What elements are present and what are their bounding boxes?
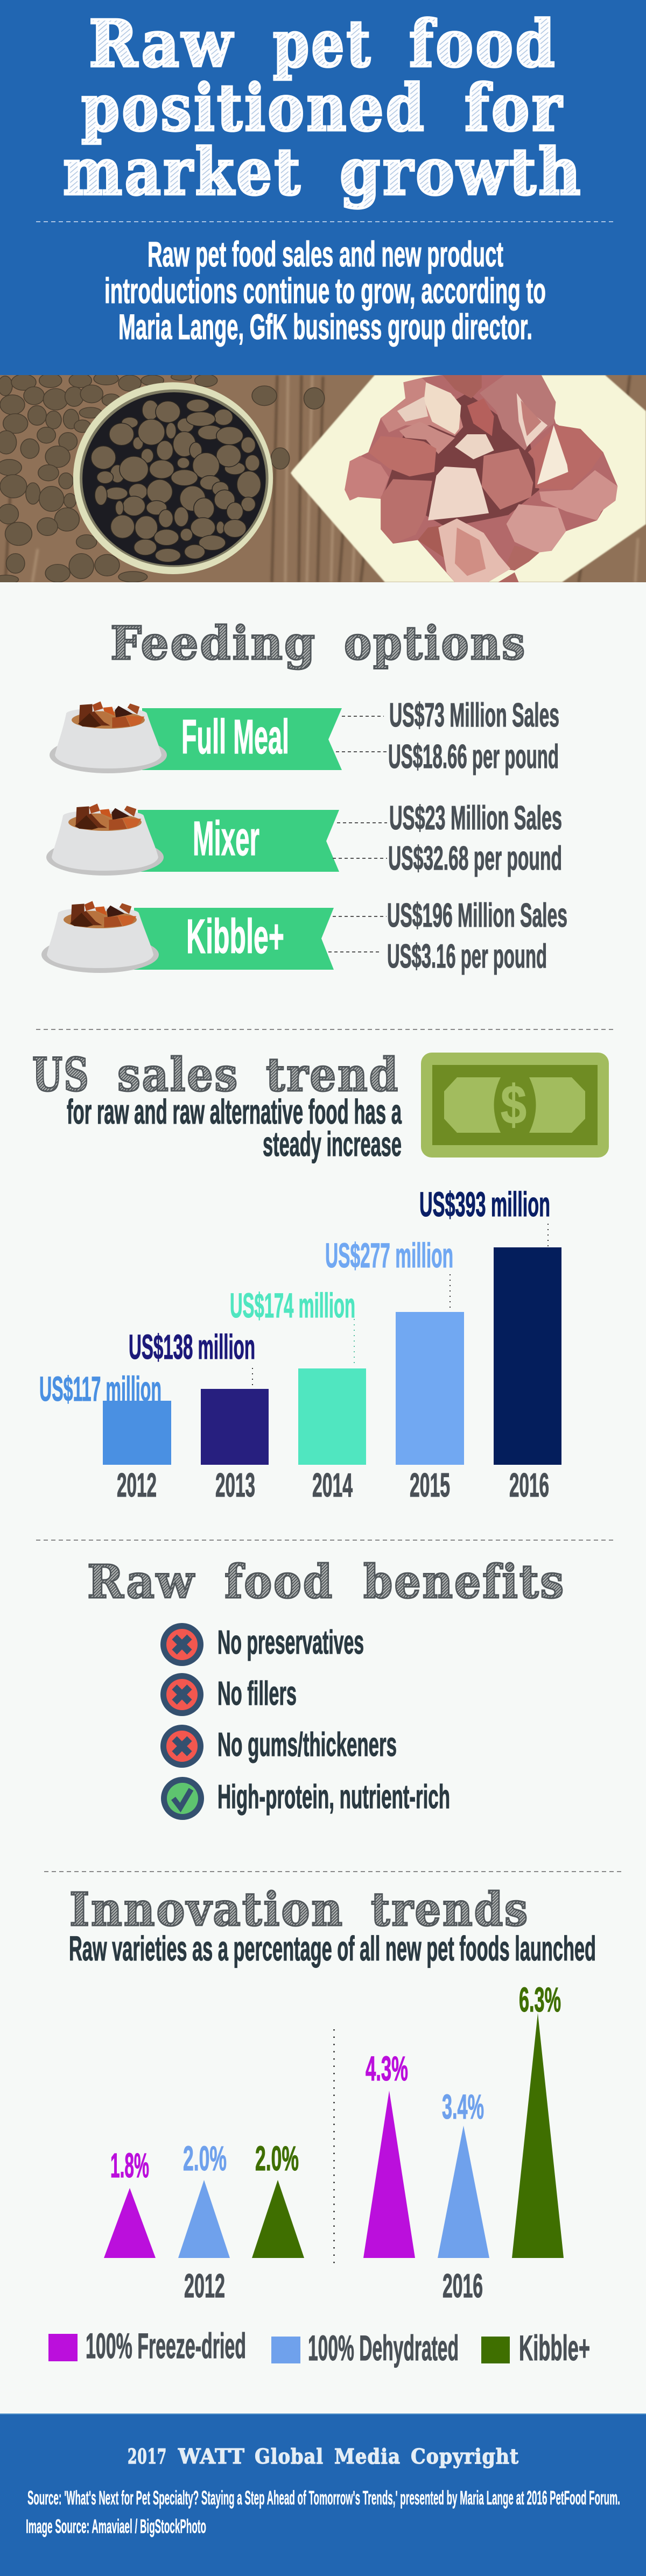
heading: raw food benefits: food [224, 1555, 334, 1609]
icon: no gums [160, 1725, 203, 1768]
copyright: 2017 [128, 2444, 167, 2468]
title [63, 6, 583, 210]
title: Raw [89, 6, 235, 82]
heading: innovation trends: Innovation [69, 1883, 344, 1937]
triangle chart: 2.0% [255, 2139, 299, 2178]
bar chart: US$174 million [230, 1286, 355, 1325]
text: no preservatives: No preservatives [217, 1624, 364, 1661]
copyright [128, 2444, 519, 2468]
section: feeding options [41, 617, 567, 975]
bar chart: 2015 [410, 1467, 450, 1504]
raw meat [345, 375, 617, 582]
legend: 100% Freeze-dried [86, 2326, 246, 2366]
triangle chart: 2.0% [183, 2139, 227, 2178]
title: market [63, 135, 303, 210]
heading: raw food benefits: benefits [363, 1555, 565, 1609]
subtitle [104, 234, 546, 347]
copyright: WATT [178, 2444, 245, 2468]
kibble in bowl [91, 399, 261, 562]
triangle chart: 6.3% [519, 1980, 561, 2019]
section: raw food benefits [87, 1555, 565, 1820]
triangle chart: 2016 [443, 2268, 483, 2305]
title: growth [340, 135, 583, 210]
text: high protein: High-protein, nutrient-rich [217, 1779, 450, 1816]
row: mixer [46, 800, 562, 877]
panel: footer: Image Source: Amaviael / BigStockPhoto [26, 2515, 206, 2537]
legend: Kibble+ [519, 2328, 590, 2368]
heading: us sales trend: sales [117, 1048, 239, 1102]
heading: us sales trend: trend [266, 1048, 399, 1102]
copyright: Media [334, 2444, 401, 2468]
icon: no preservatives [160, 1623, 203, 1666]
bar chart: 2014 [312, 1467, 353, 1504]
heading: raw food benefits: Raw [87, 1555, 195, 1609]
heading: raw food benefits [87, 1555, 565, 1609]
triangle chart: 4.3% [366, 2049, 408, 2088]
triangle chart [104, 1980, 564, 2305]
white plate [291, 375, 646, 582]
triangle chart: 3.4% [442, 2087, 484, 2126]
legend [48, 2326, 590, 2368]
section: us sales trend [32, 1048, 609, 1504]
icon: dollar bill [421, 1053, 609, 1158]
heading: us sales trend: US [32, 1048, 90, 1102]
steel bowl [73, 382, 273, 574]
heading: innovation trends: trends [371, 1883, 529, 1937]
triangle chart: 2012 [184, 2268, 225, 2305]
text: no fillers: No fillers [217, 1675, 297, 1712]
bar chart [39, 1185, 561, 1504]
bar chart: 2012 [117, 1467, 157, 1504]
bar chart: US$117 million [39, 1370, 162, 1408]
copyright: Global [255, 2444, 324, 2468]
bar chart: 2016 [509, 1467, 549, 1504]
scattered kibble [0, 372, 325, 584]
copyright: Copyright [411, 2444, 519, 2468]
bar chart: US$277 million [325, 1236, 453, 1275]
panel: footer [0, 2413, 646, 2576]
heading: feeding options: options [344, 617, 526, 671]
title: food [409, 6, 557, 82]
row: mixer: Mixer [193, 812, 259, 866]
section: innovation trends [48, 1883, 596, 2368]
heading: feeding options: Feeding [110, 617, 317, 671]
panel: header [0, 0, 646, 375]
icon: no fillers [160, 1673, 203, 1716]
icon: dollar bill: $ [501, 1074, 526, 1135]
triangle chart: 1.8% [110, 2146, 149, 2185]
title: positioned [81, 70, 426, 146]
subheading [67, 1092, 402, 1163]
heading: us sales trend [32, 1048, 399, 1102]
row: full meal: Full Meal [181, 710, 289, 764]
legend: 100% Dehydrated [308, 2328, 459, 2368]
text: no gums: No gums/thickeners [217, 1726, 397, 1763]
heading: feeding options [110, 617, 526, 671]
heading: innovation trends [69, 1883, 529, 1937]
photo: kibble bowl and raw meat plate [0, 372, 646, 584]
subheading: steady increase [263, 1125, 402, 1163]
bar chart: US$138 million [129, 1328, 255, 1366]
row: full meal [50, 697, 559, 775]
title: for [465, 70, 564, 146]
row: kibble plus: Kibble+ [186, 910, 284, 964]
row: kibble plus [41, 897, 567, 975]
icon: check [161, 1777, 204, 1820]
title: pet [273, 6, 373, 82]
bar chart: 2013 [215, 1467, 255, 1504]
